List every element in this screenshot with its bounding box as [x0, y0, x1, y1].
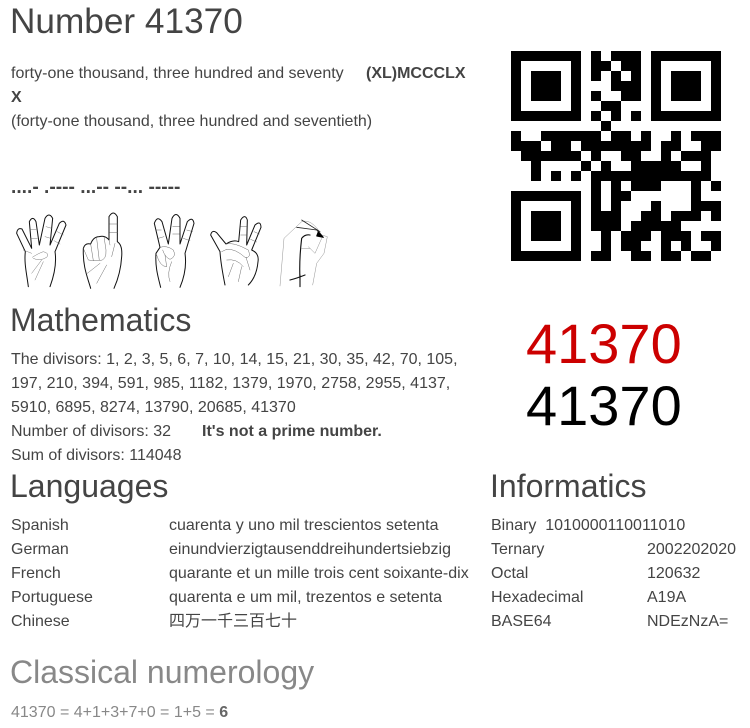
text block: divisors: 197, 210, 394, 591, 985, 1182, 1379, 1970, 2758, 2955, 4137, [11, 375, 450, 392]
table: informatics: Octal [491, 565, 528, 582]
heading: languages: Languages [10, 468, 168, 504]
table: languages: quarenta e um mil, trezentos e setenta [169, 589, 442, 606]
table: informatics: 120632 [647, 565, 700, 582]
text block: number in words and roman numeral: X [11, 89, 22, 106]
text block: number in words and roman numeral: (XL)MCCCLX [366, 65, 466, 82]
icon: hand three [154, 214, 194, 287]
title: Number 41370 [10, 2, 243, 41]
text block: divisors: It's not a prime number. [202, 423, 382, 440]
table: languages [11, 517, 469, 630]
table: languages: Spanish [11, 517, 69, 534]
text block: divisors: Number of divisors: 32 [11, 423, 171, 440]
table: languages: French [11, 565, 61, 582]
text block: number in words and roman numeral [11, 65, 466, 130]
table: languages: Chinese [11, 613, 70, 630]
text block: divisors: Sum of divisors: 114048 [11, 447, 181, 464]
text block: divisors [11, 351, 458, 464]
icon: sign language hands [16, 212, 328, 289]
icon: hand zero [280, 220, 327, 287]
table: informatics: 2002202020 [647, 541, 736, 558]
table: informatics: NDEzNzA= [647, 613, 728, 630]
table: informatics: A19A [647, 589, 686, 606]
icon: hand four [17, 215, 66, 287]
number in black: 41370 [526, 374, 682, 437]
QR code [511, 51, 721, 261]
table: languages: einundvierzigtausenddreihundertsiebzig [169, 541, 451, 558]
heading: classical numerology: Classical numerology [10, 654, 314, 690]
table: informatics: BASE64 [491, 613, 551, 630]
text block: number in words and roman numeral: forty-one thousand, three hundred and seventy [11, 65, 344, 82]
table: languages: quarante et un mille trois cent soixante-dix [169, 565, 469, 582]
table: languages: 四万一千三百七十 [169, 613, 297, 630]
table: languages: cuarenta y uno mil trescientos setenta [169, 517, 438, 534]
table: informatics: Ternary [491, 541, 544, 558]
icon: hand four fingers crossed [211, 217, 261, 285]
number in red: 41370 [526, 312, 682, 375]
text block: number in words and roman numeral: (forty-one thousand, three hundred and seventieth) [11, 113, 372, 130]
heading: informatics: Informatics [490, 468, 646, 504]
text block: divisors: The divisors: 1, 2, 3, 5, 6, 7, 10, 14, 15, 21, 30, 35, 42, 70, 105, [11, 351, 458, 368]
table: languages: Portuguese [11, 589, 93, 606]
table: informatics [491, 517, 736, 630]
heading: mathematics: Mathematics [10, 302, 191, 338]
morse code: ....- .---- ...-- --... ----- [11, 177, 180, 198]
text block: numerology sum: 41370 = 4+1+3+7+0 = 1+5 = 6 [11, 704, 228, 721]
table: informatics: Hexadecimal [491, 589, 583, 606]
text block: divisors: 5910, 6895, 8274, 13790, 20685, 41370 [11, 399, 296, 416]
table: languages: German [11, 541, 69, 558]
table: informatics: Binary 1010000110011010 [491, 517, 685, 534]
icon: hand one [83, 213, 122, 288]
